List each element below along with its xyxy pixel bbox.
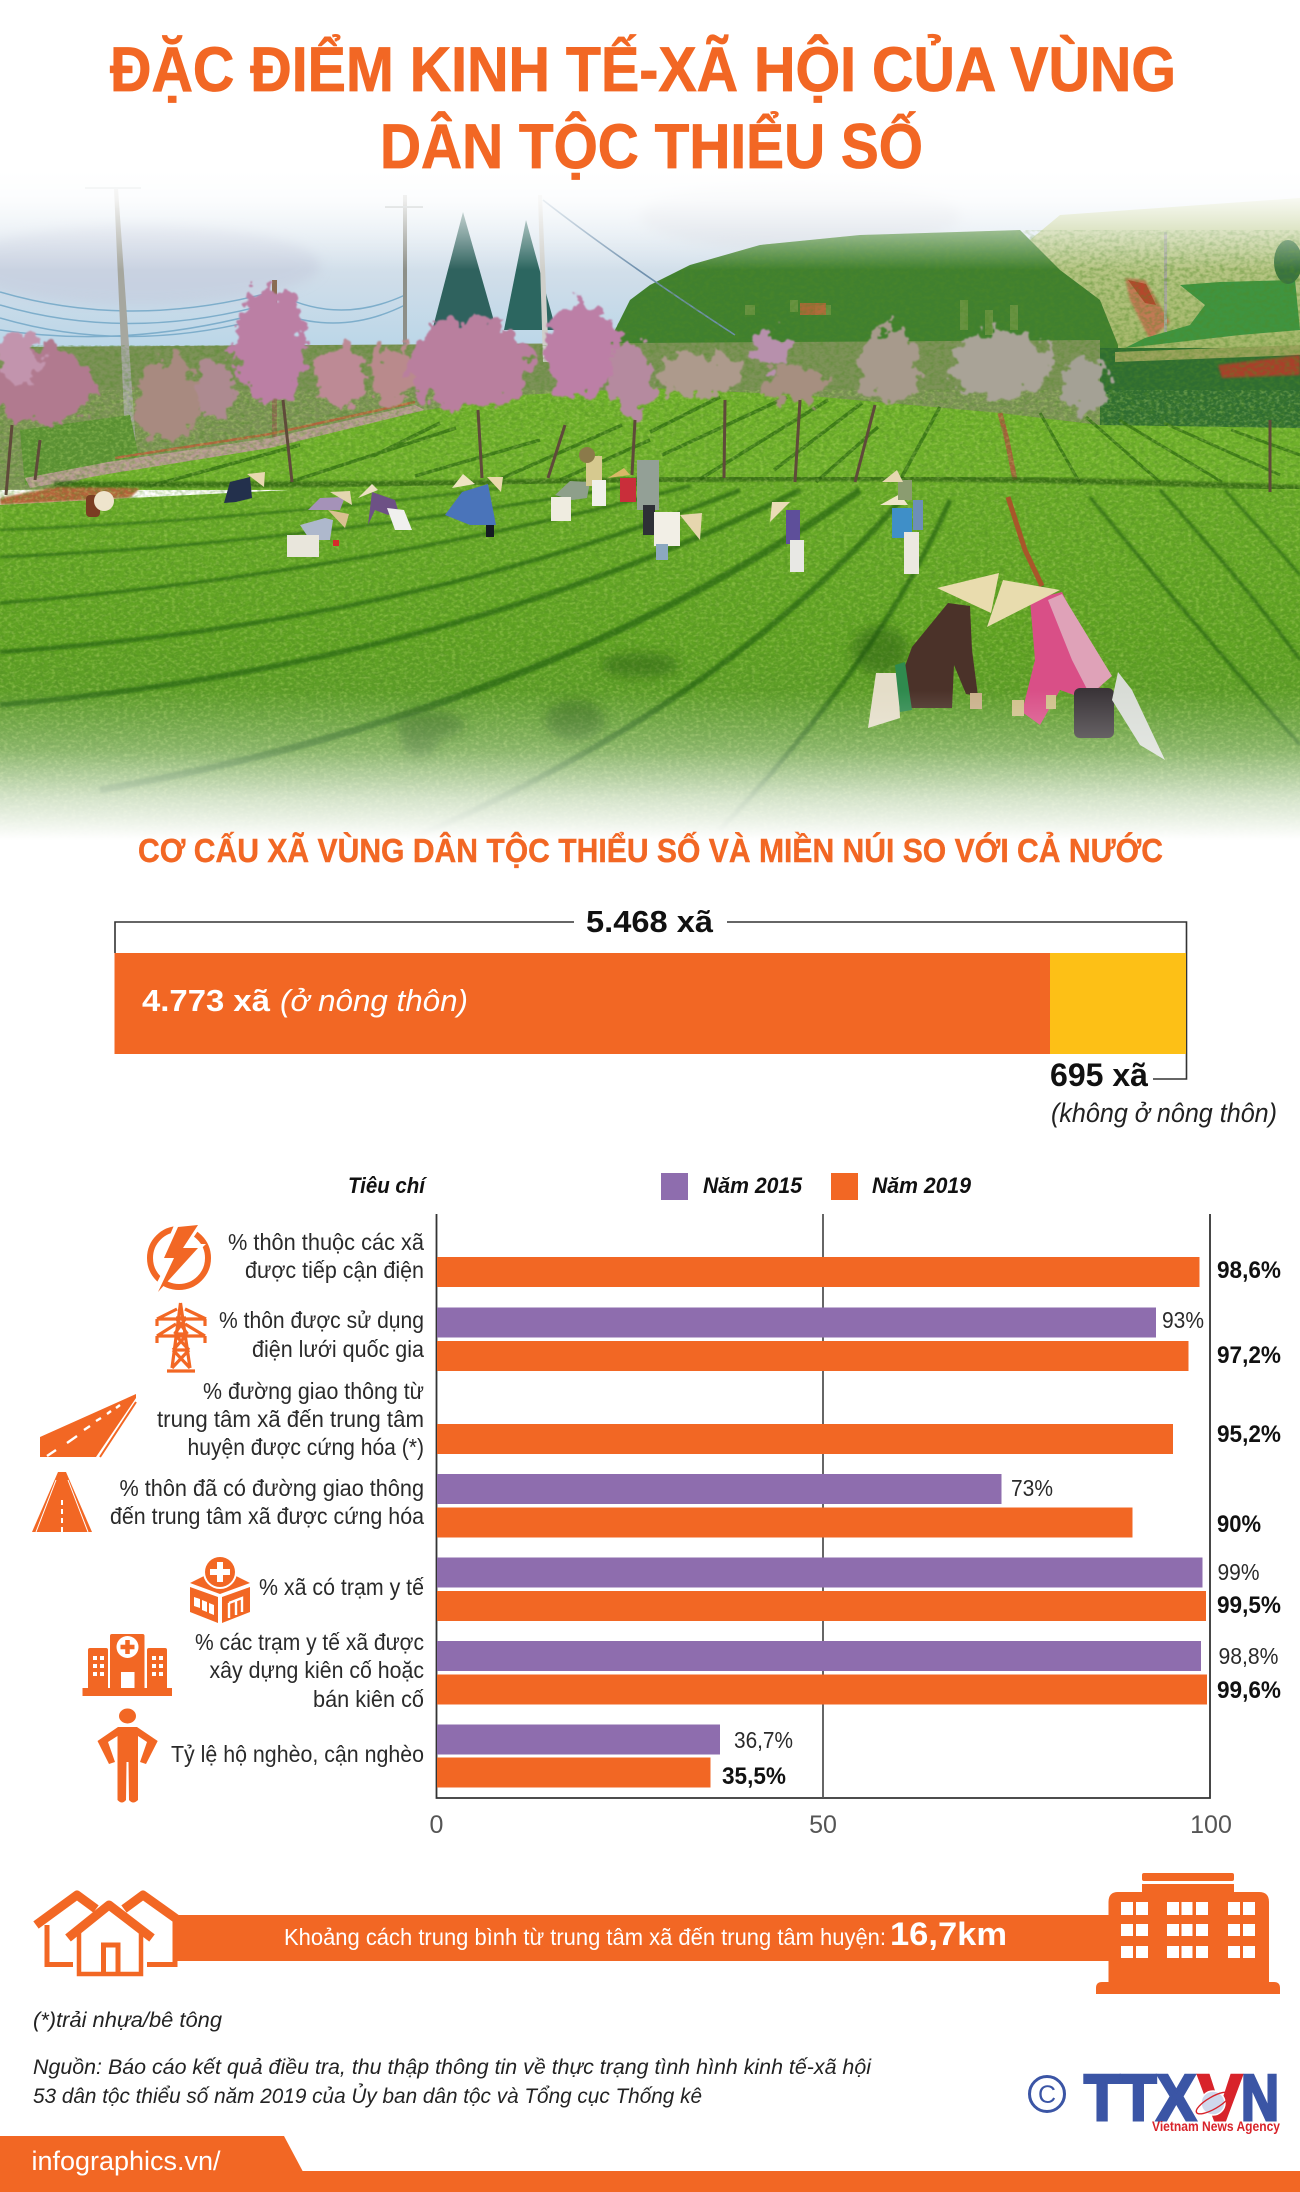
category labels: bán kiên cố (313, 1686, 424, 1712)
bars (437, 1257, 1207, 1788)
icon: person with hands on hips (98, 1708, 158, 1802)
far hillside (1020, 198, 1300, 350)
hedge in front of terraces (54, 478, 1300, 488)
category labels: % thôn đã có đường giao thông (120, 1475, 424, 1501)
terraces left of the road (20, 415, 140, 485)
legend: Năm 2019 (872, 1173, 972, 1198)
logo: TTXVN Vietnam News Agency: TTX (1084, 2061, 1196, 2134)
values 2019: 35,5% (722, 1763, 786, 1790)
category labels: được tiếp cận điện (245, 1257, 424, 1283)
two foreground tea pickers with conical hats (868, 573, 1165, 760)
values 2019: 99,5% (1217, 1592, 1281, 1619)
chart header: criteria label: Tiêu chí (348, 1173, 428, 1198)
footnote: (*)trải nhựa/bê tông (33, 2009, 222, 2032)
values 2019: 98,6% (1217, 1257, 1281, 1284)
blossom and bare tree crowns (0, 287, 1107, 440)
icon: district office building (1096, 1873, 1280, 1994)
category labels: xây dựng kiên cố hoặc (210, 1657, 424, 1683)
icon: hospital (82, 1634, 172, 1696)
logo: TTXVN Vietnam News Agency: N (1241, 2061, 1279, 2134)
values 2019: 99,6% (1217, 1677, 1281, 1704)
banner text: 16,7km (890, 1916, 1007, 1952)
stacked bar: communes (114, 904, 1277, 1128)
title: DÂN TỘC THIỂU SỐ (380, 111, 923, 182)
title (110, 34, 1176, 182)
rural label: 4.773 xã (142, 983, 271, 1018)
non-rural label: (không ở nông thôn) (1051, 1098, 1277, 1128)
distance banner (177, 1915, 1109, 1961)
logo: TTXVN Vietnam News Agency: C (1038, 2081, 1056, 2109)
icon: lightning bolt (148, 1222, 208, 1300)
bar chart (430, 1214, 1281, 1839)
road and red soil (25, 405, 425, 488)
shadow bands in the mid field (395, 626, 908, 757)
values 2015: 73% (1011, 1475, 1053, 1501)
banner text: Khoảng cách trung bình từ trung tâm xã đến trung tâm huyện: (284, 1924, 886, 1950)
lower tea field (0, 482, 1300, 840)
values 2015 (734, 1307, 1278, 1753)
values 2015: 93% (1162, 1307, 1204, 1333)
small workers in the field (86, 447, 923, 574)
category labels: % thôn thuộc các xã (228, 1229, 425, 1255)
values 2019 (722, 1257, 1281, 1790)
rural segment (114, 953, 1050, 1054)
total label: 5.468 xã (586, 904, 714, 939)
section heading: commune structure: CƠ CẤU XÃ VÙNG DÂN TỘC THIỂU SỐ VÀ MIỀN NÚI SO VỚI CẢ NƯỚC (138, 831, 1163, 869)
axis ticks: 0 (430, 1811, 443, 1839)
category labels (110, 1229, 425, 1767)
values 2019: 95,2% (1217, 1421, 1281, 1448)
upper tea terraces (54, 388, 1300, 490)
non-rural segment (1050, 953, 1186, 1054)
category labels: % thôn được sử dụng (219, 1307, 424, 1333)
non-rural label (1050, 1057, 1277, 1128)
icon: road straight (32, 1472, 92, 1532)
category labels: % xã có trạm y tế (259, 1574, 424, 1600)
mid ground behind trees (0, 340, 1100, 490)
source text (33, 2056, 872, 2108)
source text: 53 dân tộc thiểu số năm 2019 của Ủy ban dân tộc và Tổng cục Thống kê (33, 2084, 702, 2108)
red earth on the hillside (1125, 278, 1170, 340)
plantation (610, 230, 1118, 348)
title: ĐẶC ĐIỂM KINH TẾ-XÃ HỘI CỦA VÙNG (110, 34, 1176, 105)
rural label (142, 983, 468, 1018)
icon: houses (36, 1895, 178, 1974)
category labels: huyện được cứng hóa (*) (188, 1434, 424, 1460)
category labels: Tỷ lệ hộ nghèo, cận nghèo (171, 1741, 424, 1767)
conifers (433, 212, 494, 329)
fades to white (0, 170, 1300, 270)
axis ticks: 100 (1190, 1811, 1232, 1839)
legend: Năm 2015 (703, 1173, 803, 1198)
non-rural label: 695 xã (1050, 1057, 1148, 1093)
logo: TTXVN Vietnam News Agency: Vietnam News Agency (1152, 2119, 1280, 2134)
axis ticks (430, 1811, 1232, 1839)
hedges at right (1090, 348, 1300, 430)
legend (661, 1173, 972, 1200)
source text: Nguồn: Báo cáo kết quả điều tra, thu thập thông tin về thực trạng tình hình kinh tế-xã hội (33, 2056, 872, 2079)
tree trunks (6, 400, 1270, 495)
category labels: % các trạm y tế xã được (195, 1629, 424, 1655)
power poles and wires (0, 187, 1167, 460)
rural label: (ở nông thôn) (280, 983, 468, 1018)
values 2019: 97,2% (1217, 1342, 1281, 1369)
website label: infographics.vn/ (32, 2146, 221, 2176)
values 2015: 99% (1218, 1559, 1260, 1585)
category labels: đến trung tâm xã được cứng hóa (110, 1503, 425, 1529)
icon: power pylon (157, 1303, 206, 1371)
hero photo: tea pickers on a hillside (0, 170, 1300, 840)
banner text (284, 1916, 1007, 1952)
values 2015: 36,7% (734, 1727, 793, 1753)
axis ticks: 50 (809, 1811, 837, 1839)
logo: TTXVN Vietnam News Agency (1030, 2061, 1280, 2134)
category labels: % đường giao thông từ (203, 1378, 424, 1404)
icon: road perspective (40, 1394, 136, 1457)
values 2015: 98,8% (1218, 1643, 1278, 1669)
logo: TTXVN Vietnam News Agency: V (1198, 2061, 1242, 2134)
dark furrows between tea rows (0, 484, 1300, 835)
category labels: trung tâm xã đến trung tâm (157, 1406, 424, 1432)
tea patch on the right (1125, 280, 1300, 348)
footer band (0, 2136, 1300, 2192)
icon: commune clinic (190, 1555, 250, 1623)
values 2019: 90% (1217, 1511, 1261, 1538)
category labels: điện lưới quốc gia (252, 1336, 425, 1362)
